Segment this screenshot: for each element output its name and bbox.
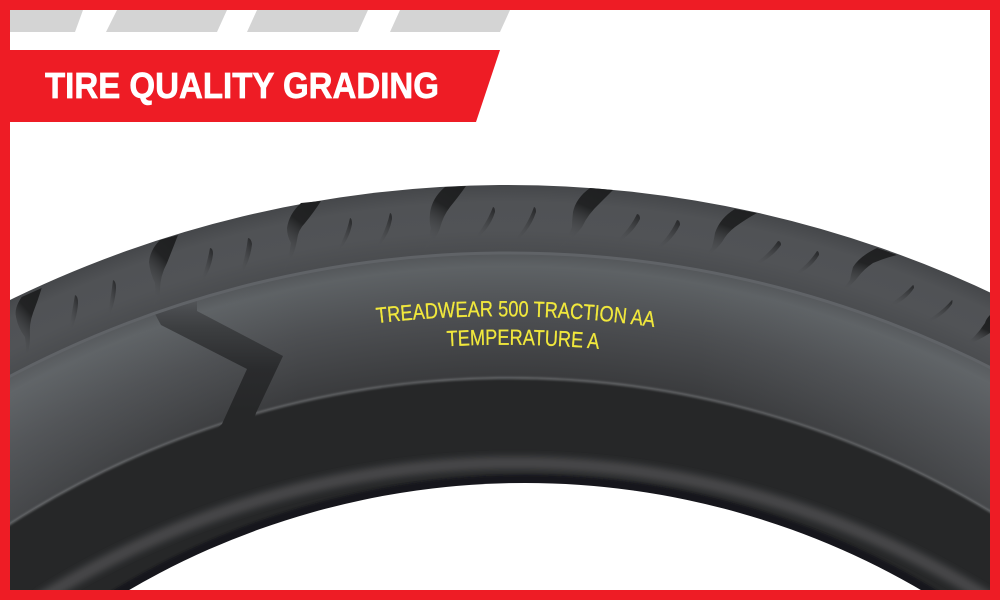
sidewall ridge line <box>0 253 1000 382</box>
tire tread band <box>0 185 1000 600</box>
tire <box>0 185 1000 600</box>
bead shadow <box>97 475 953 600</box>
grading line 2: TEMPERATURE A <box>446 330 599 349</box>
tread grooves <box>16 186 990 362</box>
tread sipes <box>68 207 952 337</box>
dark band highlight edge <box>0 378 1000 530</box>
grading line 1: TREADWEAR 500 TRACTION AA <box>376 300 654 328</box>
title: TIRE QUALITY GRADING <box>45 65 439 106</box>
wheel opening <box>112 483 938 600</box>
header speed stripes <box>10 10 510 32</box>
bead ridge <box>39 463 991 600</box>
sidewall edge sheen <box>0 253 1000 600</box>
dark inner band <box>0 378 1000 600</box>
sidewall <box>0 253 1000 600</box>
chevron notch <box>155 299 283 440</box>
title banner <box>10 50 500 122</box>
sidewall grading text <box>376 300 654 349</box>
